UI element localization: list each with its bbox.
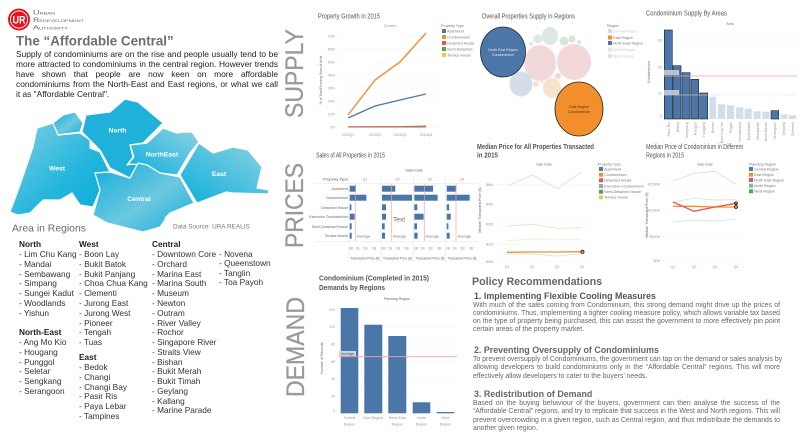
bubble: North East Region — [480, 27, 526, 77]
line chart: median price for all properties: $2M — [486, 222, 493, 226]
policy 1 text: condominiums. Thus, implementing a tighter cooling measure policy, which allows variable tax based — [473, 310, 780, 317]
legend: region: West Region — [613, 54, 634, 58]
bubble: North East Region: Condominium — [492, 53, 514, 57]
list: West and East areas: - Boon Lay — [79, 249, 119, 259]
line chart: median price of condominium by region: Q2 — [692, 265, 696, 269]
region: Central — [93, 163, 194, 232]
line chart: median price for all properties: $0M — [486, 260, 493, 264]
line chart: median price of condominium by region: $1000K — [648, 208, 661, 212]
region: NorthEast — [128, 128, 199, 175]
list: West and East areas: - Bedok — [79, 362, 108, 372]
bar chart: sales of all properties: 2B — [363, 246, 368, 250]
bar chart: condominium supply by areas: Serangoon — [773, 122, 777, 140]
list: Central areas: - Kallang — [152, 396, 185, 406]
list: West and East areas: East — [79, 352, 97, 362]
bar chart: condominium supply by areas: Hougang — [702, 122, 706, 137]
legend: property type: Detached House — [604, 179, 631, 183]
legend: region: North Region — [613, 48, 635, 52]
logo: Urban Redevelopment Authority: Urban — [33, 9, 55, 16]
data source: Data Source: URA REALIS — [173, 224, 250, 230]
bar chart: condominium supply by areas: 20 — [658, 66, 662, 70]
list: Central areas: - Museum — [152, 288, 189, 298]
line chart: property growth: 2015Q3 — [394, 133, 406, 137]
list: West and East areas: - Tuas — [79, 337, 102, 347]
bar chart: condominium supply by areas: Condominium — [647, 61, 651, 83]
policy 1 text: on the type of property being purchased, this can assist the government to more effectively pin point — [473, 318, 780, 325]
list: Central areas — [152, 239, 217, 415]
list: Central areas: Central — [152, 239, 181, 249]
list: West and East areas: - Tampines — [79, 411, 119, 421]
bar chart: condominium demand by regions: Region — [440, 422, 451, 426]
list: West and East areas: - Changi Bay — [79, 382, 127, 392]
bar chart: sales of all properties: Transacted Price ($) — [416, 256, 444, 260]
bar chart: sales of all properties: 1B — [355, 246, 360, 250]
bar chart: sales of all properties: Average — [426, 234, 439, 238]
bar chart: condominium demand by regions: Region — [416, 422, 427, 426]
line chart: median price for all properties: Q3 — [555, 265, 559, 269]
line chart: median price of condominium by region: $500K — [650, 235, 661, 239]
bar chart: sales of all properties: 1B — [388, 246, 393, 250]
list: North and North-East areas — [19, 239, 77, 396]
bar chart: sales of all properties: Q4 — [460, 178, 464, 182]
bar chart: condominium demand by regions: West — [441, 416, 450, 420]
intro paragraph: it as "Affordable Central". — [16, 89, 109, 99]
policy 2 text: allowing developers to build condominiums only in the “Affordable Central” regions. This will more — [473, 364, 780, 371]
list: North and North-East areas: - Ang Mo Kio — [19, 337, 67, 347]
bar chart: condominium demand by regions: East Region — [364, 416, 383, 420]
line chart: median price of condominium by region: Median Transacted Price ($) — [645, 192, 649, 238]
bar chart: sales of all properties: Q1 — [363, 178, 367, 182]
policy 3 text — [473, 400, 780, 432]
bar chart: condominium supply by areas: Bishan — [711, 122, 715, 133]
line chart: property growth — [318, 14, 474, 137]
policy 3 text: prevent overcrowding in a given region, such as Central region, and thus redistribute the demands to — [473, 416, 780, 424]
legend: region: East Region — [613, 36, 633, 40]
bar chart: condominium demand by regions — [319, 276, 457, 426]
bar chart: condominium demand by regions: Condominium (Completed in 2015) — [319, 276, 429, 282]
legend: property type: Property Type — [441, 24, 464, 28]
bar chart: sales of all properties: 3B — [372, 246, 377, 250]
list: Central areas continued: - Novena — [219, 249, 253, 259]
list: North and North-East areas: - Mandai — [19, 259, 51, 269]
region: East — [180, 143, 269, 203]
legend: property type — [441, 24, 474, 57]
list: West and East areas: - Tengah — [79, 327, 111, 337]
bar chart: sales of all properties: Sales of All Properties in 2015 — [316, 152, 385, 160]
legend: region: North East Region — [613, 41, 643, 45]
policy 2 text: To prevent oversupply of Condominiums, the government can tap on the demand or sales analysis by — [473, 356, 782, 363]
bar chart: condominium supply by areas: Clementi — [791, 122, 795, 136]
bubble: North East Region: North East Region — [488, 48, 518, 52]
bar chart: sales of all properties: 0B — [446, 246, 451, 250]
line chart: median price for all properties: $1M — [486, 242, 493, 246]
list: West and East areas: - Pasir Ris — [79, 391, 117, 401]
policy 1 heading: 1. Implementing Flexible Cooling Measures — [474, 291, 656, 301]
list: West and East areas — [79, 239, 148, 421]
line chart: median price for all properties: Median Price for All Properties Transacted — [477, 144, 594, 151]
bar chart: condominium supply by areas — [646, 10, 797, 143]
map labels: NorthEast — [146, 151, 179, 158]
section label: supply: SUPPLY — [281, 29, 309, 118]
bubble: East Region: Condominium — [568, 110, 590, 114]
list: West and East areas: West — [79, 239, 99, 249]
legend: planning region: Planning Region — [749, 162, 776, 166]
policy 3 text: another given region. — [473, 425, 538, 432]
section label: demand: DEMAND — [282, 297, 310, 397]
line chart: property growth: % of Total Running Sum of Units — [319, 55, 323, 104]
bubble chart: overall supply: Overall Properties Supply in Regions — [482, 14, 575, 20]
bar chart: sales of all properties: Transacted Price ($) — [448, 256, 476, 260]
bar chart: sales of all properties: Q2 — [395, 178, 400, 182]
line chart: median price for all properties: Sale Date — [536, 162, 552, 166]
policy 1 text: With much of the sales coming from Condominium, this strong demand might drive up the prices of — [473, 302, 780, 308]
line chart: median price of condominium by region: $1500K — [648, 182, 661, 186]
bar chart: condominium demand by regions: 80 — [331, 342, 335, 346]
bar chart: sales of all properties: Q3 — [428, 178, 432, 182]
legend: property type: Terrace House — [604, 196, 628, 200]
legend: property type: Property Type — [598, 162, 621, 166]
list: Central areas: - Singapore River — [152, 337, 217, 347]
list: West and East areas: - Jurong West — [79, 308, 130, 318]
line chart: property growth: Property Growth in 2015 — [318, 14, 380, 20]
logo: Urban Redevelopment Authority — [8, 8, 85, 32]
list: North and North-East areas: - Sembawang — [19, 269, 70, 279]
legend: property type: Condominium — [604, 173, 627, 177]
bar chart: sales of all properties: 2B — [428, 246, 433, 250]
bar chart: sales of all properties: 2B — [460, 246, 465, 250]
bar chart: condominium supply by areas: 10 — [658, 92, 662, 96]
line chart: median price for all properties: Q2 — [530, 265, 534, 269]
bar chart: condominium demand by regions: Region — [344, 422, 355, 426]
legend: property type: Condominium — [447, 35, 470, 39]
bar chart: sales of all properties: 3B — [404, 246, 409, 250]
bar chart: condominium demand by regions: Average — [341, 352, 354, 356]
map of regions — [10, 99, 269, 232]
policy 2 text — [473, 356, 782, 380]
policy 1 text: certain areas of the property market. — [473, 326, 584, 333]
list: West and East areas: - Choa Chua Kang — [79, 278, 148, 288]
list: North and North-East areas: - Lim Chu Kang — [19, 249, 77, 259]
intro paragraph: condominiums from the North-East and East regions, or what we call — [16, 79, 278, 89]
map labels: Central — [127, 196, 151, 203]
intro paragraph — [16, 49, 278, 99]
bar chart: condominium supply by areas: Tengah — [729, 122, 733, 134]
line chart: property growth: 2015Q2 — [369, 133, 381, 137]
legend: property type: Apartment — [447, 29, 464, 33]
section label: prices: PRICES — [281, 163, 309, 248]
line chart: property growth: 2015Q4 — [420, 133, 432, 137]
legend: property type: Apartment — [604, 167, 621, 171]
list: West and East areas: - Bukit Batok — [79, 259, 126, 269]
line chart: property growth: Quarter — [384, 24, 397, 28]
title: The “Affordable Central” — [16, 34, 174, 48]
bar chart: sales of all properties: Apartment — [331, 187, 348, 191]
bar chart: sales of all properties: 0B — [349, 246, 354, 250]
line chart: median price of condominium by region: Q1 — [671, 265, 675, 269]
line chart: median price of condominium by region: Sale Date — [697, 162, 713, 166]
map labels: East — [212, 171, 227, 178]
bar chart: condominium supply by areas: Bukit Merah — [764, 122, 768, 141]
bar chart: condominium supply by areas: Pasir Ris — [667, 122, 671, 136]
bar chart: condominium supply by areas: Area — [726, 22, 734, 26]
bar chart: sales of all properties: 3B — [437, 246, 442, 250]
bar chart: sales of all properties: 1B — [420, 246, 425, 250]
bar chart: sales of all properties: Average — [357, 234, 370, 238]
line chart: median price of condominium by region: $0K — [654, 259, 661, 263]
legend: planning region: North Region — [754, 184, 776, 188]
bar chart: condominium demand by regions: Region — [392, 422, 403, 426]
list: Central areas: - Bukit Merah — [152, 366, 201, 376]
list: North and North-East areas: - Sungei Kadut — [19, 288, 74, 298]
line chart: property growth: 2015Q1 — [342, 133, 354, 137]
bar chart: condominium demand by regions: 20 — [331, 394, 335, 398]
line chart: median price of condominium by region: Regions in 2015 — [646, 152, 684, 159]
bar chart: condominium demand by regions: 120 — [329, 308, 335, 312]
logo: Urban Redevelopment Authority: UR — [12, 14, 26, 26]
policy 1 text — [473, 302, 780, 333]
list: North and North-East areas: - Punggol — [19, 357, 55, 367]
intro paragraph: Supply of condominiums are on the rise and people usually tend to be — [16, 49, 278, 59]
map labels: West — [49, 165, 66, 172]
bar chart: condominium demand by regions: Number of Records — [320, 342, 324, 374]
bubble chart: overall supply — [480, 14, 643, 136]
line chart: property growth: 30% — [328, 86, 336, 90]
bar chart: sales of all properties: Condominium — [326, 196, 348, 200]
bar chart: sales of all properties: 2B — [396, 246, 401, 250]
list: Central areas: - Marine Parade — [152, 405, 212, 415]
bar chart: condominium supply by areas: Bukit Batok — [747, 122, 751, 140]
logo: Urban Redevelopment Authority: Authority — [33, 25, 68, 32]
list: West and East areas: - Bukit Panjang — [79, 269, 135, 279]
list: Central areas continued: - Toa Payoh — [219, 277, 263, 287]
bar chart: sales of all properties: Terrace House — [325, 234, 348, 238]
line chart: median price for all properties: Q4 — [580, 265, 584, 269]
bar chart: sales of all properties: Sales Date — [405, 168, 423, 172]
legend: planning region: East Region — [754, 173, 774, 177]
legend: region: Region — [607, 24, 619, 28]
list: Central areas: - Geylang — [152, 386, 188, 396]
list: West and East areas: - Changi — [79, 372, 110, 382]
line chart: property growth: 20% — [328, 100, 336, 104]
bar chart: condominium demand by regions: 100 — [329, 325, 335, 329]
line chart: median price of condominium by region: Q3 — [713, 265, 717, 269]
bar chart: sales of all properties: 0B — [414, 246, 419, 250]
bar chart: sales of all properties: Average — [458, 234, 471, 238]
list: Central areas continued: - Tanglin — [219, 268, 250, 278]
bar chart: sales of all properties: 0B — [381, 246, 386, 250]
bar chart: condominium supply by areas: Bedok — [676, 122, 680, 132]
legend: property type: Terrace House — [447, 53, 471, 57]
bar chart: condominium demand by regions: North — [417, 416, 426, 420]
list: North and North-East areas: - Yishun — [19, 308, 49, 318]
policy 2 heading: 2. Preventing Oversupply of Condominiums — [474, 345, 659, 355]
logo: Urban Redevelopment Authority: Redevelopment — [33, 17, 85, 24]
line chart: median price for all properties — [477, 144, 644, 269]
list: North and North-East areas: - Seletar — [19, 366, 50, 376]
line chart: median price for all properties: Q1 — [505, 265, 509, 269]
bar chart: condominium demand by regions: Central — [344, 416, 355, 420]
list: Central areas: - Rochor — [152, 327, 184, 337]
list: North and North-East areas: North — [19, 239, 41, 249]
list: Central areas: - Straits View — [152, 347, 201, 357]
legend: property type: Detached House — [447, 41, 474, 45]
bar chart: sales of all properties: 1B — [452, 246, 457, 250]
line chart: median price for all properties: in 2015 — [477, 152, 498, 159]
map labels — [49, 127, 227, 203]
bar chart: condominium demand by regions: Planning Region — [384, 297, 410, 301]
list: North and North-East areas: - Woodlands — [19, 298, 65, 308]
line chart: property growth: 50% — [328, 60, 336, 64]
line chart: median price of condominium by region — [645, 144, 784, 269]
line chart: property growth: 10% — [328, 112, 336, 116]
legend: planning region: Central Region — [754, 167, 779, 171]
line chart: median price for all properties: $4M — [486, 202, 493, 206]
bar chart: sales of all properties: Text — [393, 216, 405, 224]
bar chart: condominium demand by regions: 60 — [331, 360, 335, 364]
list: North and North-East areas: - Sengkang — [19, 376, 61, 386]
list: Central areas: - Marina East — [152, 269, 201, 279]
list: Central areas: - Bukit Timah — [152, 376, 200, 386]
bubble: East Region — [555, 82, 603, 136]
list: West and East areas: - Jurong East — [79, 298, 128, 308]
line chart: property growth: 40% — [328, 74, 336, 78]
bar chart: condominium supply by areas: Boon Lay Vw — [720, 122, 724, 143]
bar chart: condominium supply by areas: Sembawang — [738, 122, 742, 142]
line chart: median price of condominium by region: Q4 — [734, 265, 738, 269]
list: North and North-East areas: North-East — [19, 327, 61, 337]
line chart: property growth: 0% — [330, 126, 336, 130]
bar chart: condominium supply by areas: Punggol — [694, 122, 698, 135]
line chart: property growth: 70% — [328, 34, 336, 38]
policy 3 text: Based on the buying behaviour of the buyers, government can then analyse the success of the — [473, 400, 780, 407]
line chart: median price of condominium by region: Median Price of Condominium in Different — [646, 144, 743, 151]
heading: area in regions: Area in Regions — [12, 224, 86, 234]
intro paragraph: more attracted to condominiums in the central region. However trends — [16, 59, 278, 69]
bar chart: condominium supply by areas: Condominium Supply By Areas — [646, 10, 727, 18]
bar chart: sales of all properties: Transacted Price ($) — [383, 256, 412, 260]
list: West and East areas: - Clementi — [79, 288, 117, 298]
legend: property type: Executive Condominium — [604, 184, 644, 188]
list: North and North-East areas: - Simpang — [19, 278, 57, 288]
list: Central areas: - Downtown Core — [152, 249, 216, 259]
list: Central areas: - Orchard — [152, 259, 187, 269]
legend: planning region — [749, 162, 784, 194]
bar chart: condominium demand by regions: 40 — [331, 377, 335, 381]
list: North and North-East areas: - Hougang — [19, 347, 58, 357]
bar chart: sales of all properties: Average — [393, 234, 406, 238]
bar chart: condominium supply by areas: 0 — [660, 114, 662, 118]
bar chart: sales of all properties: Semi-Detached House — [312, 225, 348, 229]
bar chart: condominium demand by regions: North East — [389, 416, 406, 420]
bar chart: sales of all properties: Transacted Price ($) — [350, 256, 380, 260]
policy 3 text: “Affordable Central” regions, and try to replicate that success in the West and North regions. This will — [473, 408, 780, 415]
policy 3 heading: 3. Redistribution of Demand — [474, 388, 592, 398]
list: West and East areas: - Paya Lebar — [79, 401, 127, 411]
legend: property type: Semi-Detached House — [604, 190, 641, 194]
line chart: median price for all properties: $6M — [486, 183, 493, 187]
list: Central areas continued: - Queenstown — [219, 258, 271, 268]
bar chart: sales of all properties: 3B — [469, 246, 474, 250]
bar chart: condominium supply by areas: Sengkang — [685, 122, 689, 138]
list: Central areas: - River Valley — [152, 318, 201, 328]
policy 2 text: effectively allow developers to cater to the buyers’ needs. — [473, 373, 647, 380]
bar chart: condominium demand by regions: Demands by Regions — [319, 285, 385, 292]
legend: property type — [598, 162, 644, 200]
legend: region — [607, 24, 643, 58]
region: North — [82, 99, 163, 178]
bar chart: condominium supply by areas: 30 — [658, 38, 662, 42]
heading: policy recommendations: Policy Recommendations — [472, 276, 602, 288]
legend: property type: Semi-Detached — [447, 47, 472, 51]
list: West and East areas: - Pioneer — [79, 318, 113, 328]
list: North and North-East areas: - Serangoon — [19, 386, 65, 396]
bar chart: condominium demand by regions: 0 — [333, 409, 335, 413]
bar chart: sales of all properties: Executive Condominium — [309, 215, 348, 219]
bar chart: condominium supply by areas: Geylang — [782, 122, 786, 135]
map labels: North — [108, 127, 127, 134]
region: West — [10, 123, 110, 215]
list: Central areas continued — [219, 249, 271, 287]
list: Central areas: - Outram — [152, 308, 185, 318]
bar chart: sales of all properties: Property Type — [323, 176, 349, 182]
list: Central areas: - Bishan — [152, 357, 182, 367]
bar chart: sales of all properties: Detached House — [321, 206, 348, 210]
region: small north-west area — [53, 112, 83, 135]
intro paragraph: have shown that people are now keen on more affordable — [16, 69, 278, 79]
legend: planning region: North East Region — [754, 178, 784, 182]
list: Central areas: - Newton — [152, 298, 185, 308]
bar chart: condominium supply by areas: Woodlands — [756, 122, 760, 140]
bubble: East Region: East Region — [569, 105, 589, 109]
legend: planning region: West Region — [754, 190, 775, 194]
list: Central areas: - Marina South — [152, 278, 206, 288]
legend: region: Central Region — [613, 29, 638, 33]
bar chart: sales of all properties — [309, 152, 478, 262]
line chart: property growth: 60% — [328, 48, 336, 52]
line chart: median price for all properties: Median Transacted Price ($) — [478, 187, 482, 233]
